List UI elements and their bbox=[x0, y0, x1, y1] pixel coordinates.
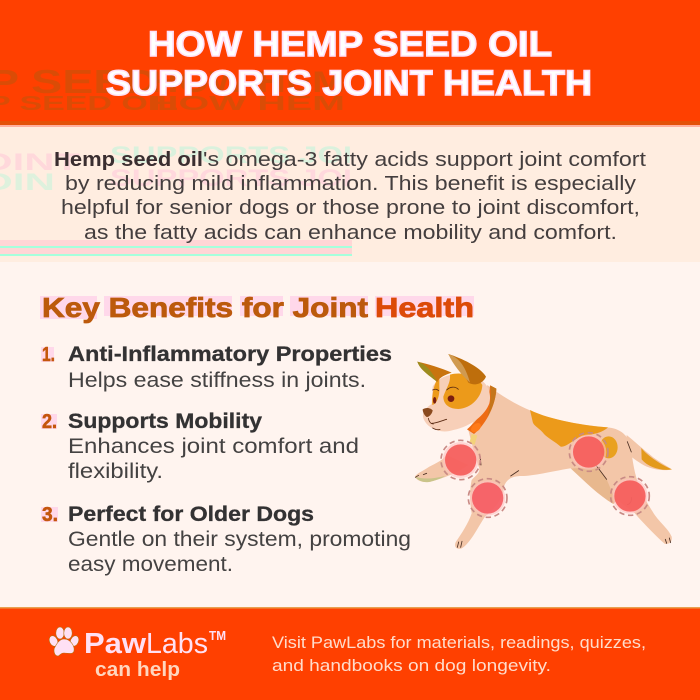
footer panel bbox=[0, 607, 700, 700]
brand logo bbox=[84, 628, 226, 681]
intro text bbox=[54, 149, 647, 244]
dog fold lines bbox=[415, 442, 671, 547]
dog head bbox=[417, 354, 490, 431]
benefit 3: Gentle on their system, promoting bbox=[68, 528, 411, 551]
dog ears bbox=[417, 354, 486, 384]
section heading bbox=[40, 292, 474, 323]
section heading: Health bbox=[375, 292, 474, 323]
intro panel: SUPPORTS JOI bbox=[110, 165, 352, 192]
section heading: Key Benefits for Joint bbox=[42, 292, 368, 323]
brand logo: Paw bbox=[84, 628, 146, 660]
joint marker: shoulder bbox=[441, 440, 480, 480]
intro text: as the fatty acids can enhance mobility and comfort. bbox=[84, 222, 617, 244]
brand logo: TM bbox=[209, 628, 226, 643]
footer text bbox=[272, 633, 646, 675]
intro panel bbox=[0, 127, 700, 262]
illustration: running dog with highlighted joints bbox=[415, 354, 672, 549]
benefit 3: easy movement. bbox=[68, 553, 233, 576]
benefit 1 bbox=[41, 343, 392, 392]
icon: paw bbox=[48, 627, 80, 656]
benefit 2: Supports Mobility bbox=[68, 410, 262, 433]
benefit 3 bbox=[41, 503, 411, 576]
intro text: 's omega-3 fatty acids support joint comfort bbox=[203, 149, 647, 171]
dog hip patch bbox=[600, 436, 618, 458]
joint marker: front knee bbox=[468, 479, 507, 517]
benefit 3: 3. bbox=[42, 504, 58, 526]
title: HOW HEMP SEED OIL bbox=[148, 25, 552, 64]
dog far legs bbox=[415, 455, 630, 504]
benefit 2: 2. bbox=[42, 411, 57, 433]
benefit 2 bbox=[41, 410, 359, 483]
dog body and legs bbox=[455, 385, 672, 549]
dog collar bbox=[467, 385, 496, 434]
joint marker: hind knee bbox=[611, 477, 649, 515]
footer text: Visit PawLabs for materials, readings, quizzes, bbox=[272, 633, 646, 652]
dog tail bbox=[627, 435, 672, 470]
benefit 1: 1. bbox=[42, 344, 55, 366]
benefit 3: Perfect for Older Dogs bbox=[68, 503, 314, 526]
benefit 2: Enhances joint comfort and bbox=[68, 435, 359, 458]
brand logo: can help bbox=[95, 659, 180, 681]
benefit 1: Anti-Inflammatory Properties bbox=[68, 343, 392, 366]
intro text: by reducing mild inflammation. This benefit is especially bbox=[65, 173, 636, 195]
footer text: and handbooks on dog longevity. bbox=[272, 656, 551, 675]
header panel: HOW HEM bbox=[150, 93, 345, 115]
benefit 1: Helps ease stiffness in joints. bbox=[68, 369, 366, 392]
intro text: helpful for senior dogs or those prone to joint discomfort, bbox=[61, 197, 640, 219]
dog back patch bbox=[530, 410, 608, 447]
header panel bbox=[0, 0, 700, 127]
intro text: Hemp seed oil bbox=[54, 149, 203, 171]
benefit 2: flexibility. bbox=[68, 460, 163, 483]
header panel: HOW HEM bbox=[150, 66, 345, 99]
intro panel: SUPPORTS JOI bbox=[110, 142, 352, 169]
dog tag bbox=[469, 434, 477, 445]
brand logo: Labs bbox=[146, 628, 208, 660]
title: SUPPORTS JOINT HEALTH bbox=[106, 64, 592, 103]
joint marker: hip bbox=[569, 433, 608, 471]
dog face bbox=[428, 387, 458, 430]
title bbox=[106, 25, 592, 103]
